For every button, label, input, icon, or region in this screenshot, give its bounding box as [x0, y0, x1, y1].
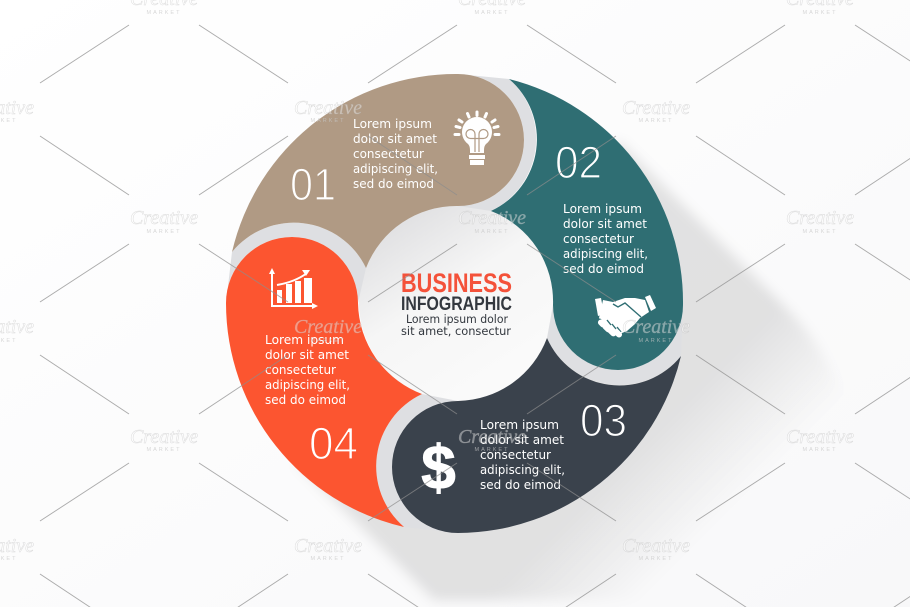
icon: handshake	[595, 295, 656, 339]
watermark captions: MARKET	[803, 229, 837, 235]
text block 03: dolor sit amet	[480, 433, 564, 447]
number 04: 04	[309, 418, 358, 469]
text block 03: sed do eimod	[480, 478, 561, 492]
text block 03: Lorem ipsum	[480, 418, 559, 432]
text block 03: adipiscing elit,	[480, 463, 565, 477]
text block 02: adipiscing elit,	[563, 247, 648, 261]
text block 03	[480, 418, 565, 492]
watermark captions: MARKET	[475, 229, 509, 235]
icon: bar chart	[269, 268, 318, 309]
heading: infographic: INFOGRAPHIC	[401, 294, 512, 315]
text block 01	[353, 117, 438, 191]
text block 04: dolor sit amet	[265, 348, 349, 362]
watermarks: Creative	[622, 535, 690, 557]
watermark captions: MARKET	[147, 229, 181, 235]
text block 02: dolor sit amet	[563, 217, 647, 231]
watermark captions: MARKET	[639, 556, 673, 562]
panel: 02 teal segment	[491, 79, 683, 370]
watermarks: Creative	[622, 316, 690, 338]
text block 01: consectetur	[353, 147, 425, 161]
text block 04: Lorem ipsum	[265, 333, 344, 347]
text block 01: adipiscing elit,	[353, 162, 438, 176]
rim crescents	[226, 74, 683, 533]
text block 03: consectetur	[480, 448, 552, 462]
text block 02: Lorem ipsum	[563, 202, 642, 216]
watermark captions: MARKET	[311, 338, 345, 344]
watermark captions: MARKET	[639, 118, 673, 124]
centre title block	[401, 268, 512, 338]
icon: light bulb	[455, 112, 499, 165]
panel: 01 tan segment	[232, 74, 524, 268]
watermarks: Creative	[622, 97, 690, 119]
watermarks: Creative	[130, 426, 198, 448]
text block 04: sed do eimod	[265, 393, 346, 407]
watermark captions: MARKET	[475, 10, 509, 16]
text block 01: Lorem ipsum	[353, 117, 432, 131]
centre disc	[359, 203, 557, 401]
watermark captions: MARKET	[147, 447, 181, 453]
text block 04: consectetur	[265, 363, 337, 377]
watermark captions: MARKET	[803, 447, 837, 453]
icon: dollar sign: $	[421, 434, 456, 503]
number 01: 01	[290, 159, 336, 210]
watermarks: Creative	[458, 426, 526, 448]
text block 04: adipiscing elit,	[265, 378, 350, 392]
text block 01: sed do eimod	[353, 177, 434, 191]
watermarks: Creative	[294, 316, 362, 338]
watermark captions: MARKET	[803, 10, 837, 16]
heading: business: BUSINESS	[401, 268, 512, 298]
text block 02: sed do eimod	[563, 262, 644, 276]
text block 02: consectetur	[563, 232, 635, 246]
number 03: 03	[580, 395, 627, 446]
panel: 04 orange segment	[226, 237, 422, 527]
watermark captions: MARKET	[475, 447, 509, 453]
watermark captions: MARKET	[147, 10, 181, 16]
watermark captions: MARKET	[639, 338, 673, 344]
text block 02	[563, 202, 648, 276]
watermarks: Creative	[786, 207, 854, 229]
watermarks: Creative	[294, 535, 362, 557]
watermarks: Creative	[130, 207, 198, 229]
watermarks: Creative	[294, 97, 362, 119]
watermark captions: MARKET	[311, 556, 345, 562]
centre text line 1: Lorem ipsum dolor	[406, 312, 508, 326]
number 02: 02	[555, 137, 602, 188]
long shadow	[297, 141, 855, 600]
watermark captions: MARKET	[311, 118, 345, 124]
centre text line 2: sit amet, consectur	[401, 324, 511, 338]
watermarks: Creative	[786, 426, 854, 448]
text block 01: dolor sit amet	[353, 132, 437, 146]
panel: 03 dark segment	[392, 338, 681, 533]
watermarks: Creative	[458, 207, 526, 229]
text block 04	[265, 333, 350, 407]
